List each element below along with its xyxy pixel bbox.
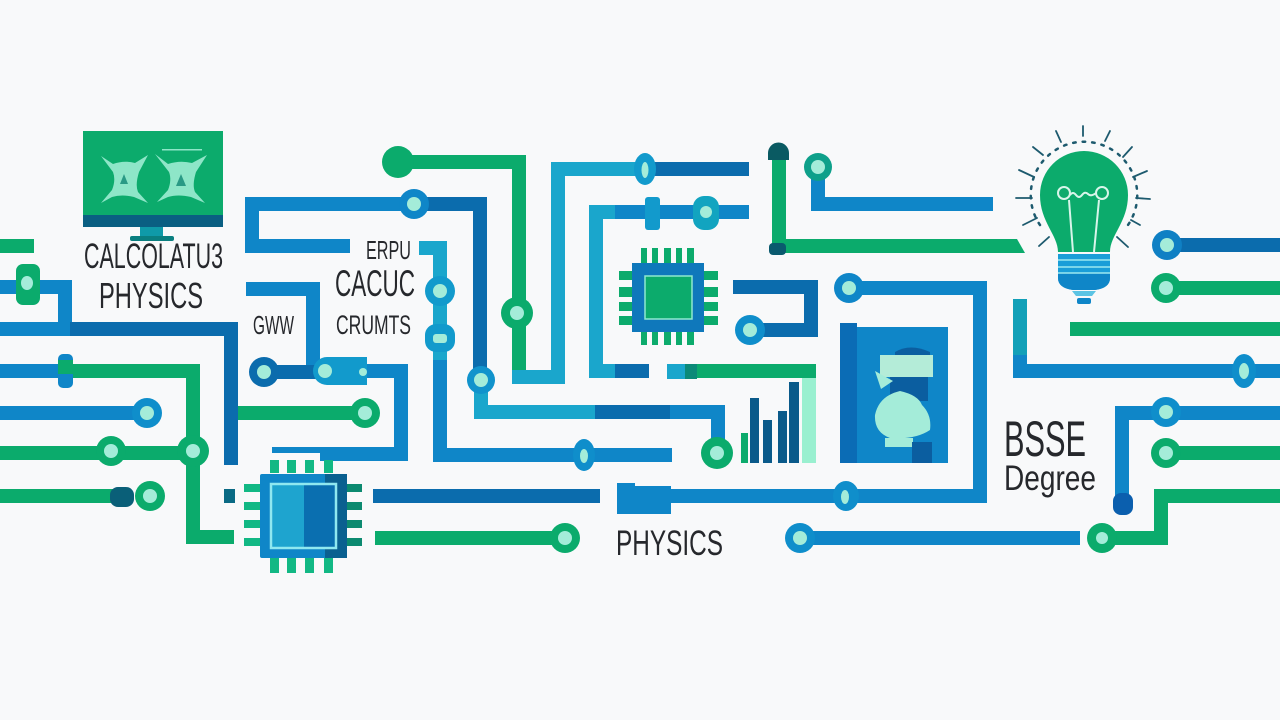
node: green b <box>177 435 209 467</box>
bottom traces <box>373 273 1080 553</box>
node: green <box>350 398 380 428</box>
green top trace <box>382 146 749 378</box>
top center traces <box>768 142 1025 255</box>
label: physics bottom: PHYSICS <box>616 524 723 563</box>
label: cacuc: CACUC <box>335 263 415 304</box>
node: green dark cap <box>110 481 165 511</box>
node: cyan upper <box>425 276 455 306</box>
left traces <box>0 246 234 537</box>
icon: book <box>840 323 948 463</box>
node: green ring <box>501 297 533 329</box>
node: cyan block <box>313 357 367 385</box>
icon: lightbulb <box>1016 126 1150 304</box>
node: green a <box>96 436 126 466</box>
node: blue ring <box>735 315 765 345</box>
heading: calculus: CALCOLATU3 <box>84 237 223 276</box>
label: gwm: GWW <box>253 310 294 340</box>
node: t junction <box>58 354 73 388</box>
node: right green <box>1151 273 1181 303</box>
icon: monitor <box>83 131 223 241</box>
node: t stub <box>645 197 660 230</box>
label: circuits: CRUMTS <box>336 310 411 340</box>
center trace to chip <box>596 196 749 371</box>
node: oval bottom <box>573 439 595 471</box>
node: teal ring <box>804 153 832 181</box>
icon: bottom chip <box>224 460 362 573</box>
heading: physics left: PHYSICS <box>99 275 203 316</box>
node: mid ring <box>467 366 495 394</box>
right traces <box>1020 230 1280 553</box>
node: right green lower <box>1151 438 1181 468</box>
node: green end <box>701 437 733 469</box>
blue trace loop with nodes <box>252 189 733 469</box>
bar chart <box>667 364 816 463</box>
node: dark dome cap <box>768 142 789 160</box>
node: dark bottom cap <box>769 243 786 255</box>
dark blue loop trace <box>733 287 811 345</box>
center-left trace <box>238 289 401 454</box>
node: oval <box>833 481 859 511</box>
node: solid green <box>382 146 414 178</box>
node: bottom blue <box>785 523 815 553</box>
node: cyan lower <box>425 324 455 352</box>
icon: green chip <box>619 248 718 345</box>
label: erpu: ERPU <box>366 235 411 265</box>
node: bottom green <box>550 523 580 553</box>
node: right upper ring <box>834 273 864 303</box>
node: left rounded <box>16 264 40 305</box>
node: dark ring <box>249 357 279 387</box>
node: cyan <box>693 196 719 230</box>
label: bsse: BSSE <box>1004 411 1086 467</box>
label: degree: Degree <box>1004 459 1096 498</box>
node: cyan oval <box>634 153 656 185</box>
node: dark blob <box>1113 493 1133 515</box>
node: right cyan ring <box>1151 397 1181 427</box>
node: blue <box>132 398 162 428</box>
node: green blob <box>1087 523 1117 553</box>
node: right blue <box>1152 230 1182 260</box>
icon: folder connector <box>617 483 671 514</box>
cyan vertical trace <box>419 248 672 471</box>
node: right oval <box>1232 354 1256 388</box>
node: top ring <box>399 189 429 219</box>
